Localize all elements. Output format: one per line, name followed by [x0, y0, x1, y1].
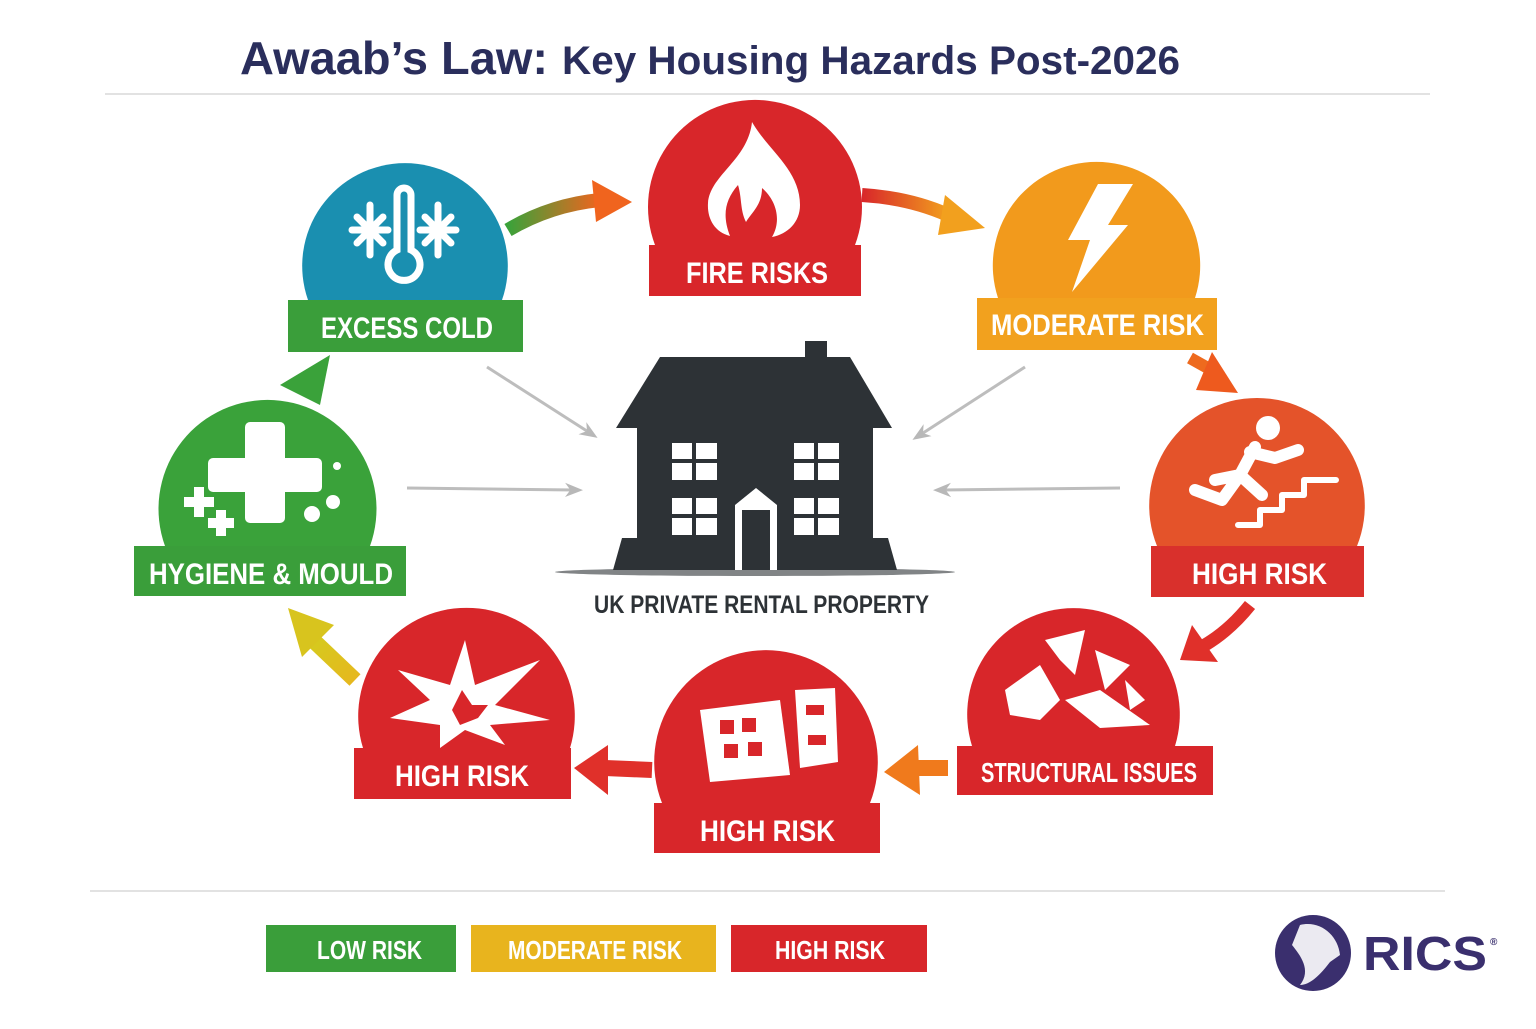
icon: broken brick wall: [700, 688, 838, 782]
node: moderate risk: MODERATE RISK: [991, 309, 1204, 342]
node: structural issues: STRUCTURAL ISSUES: [981, 757, 1197, 788]
arrow: hygiene to cold: [280, 355, 330, 405]
title: Key Housing Hazards Post-2026: [562, 39, 1180, 83]
arrows: gray to house: [407, 367, 1120, 490]
house label: UK PRIVATE RENTAL PROPERTY: [594, 591, 929, 619]
node: high risk stairs: HIGH RISK: [1192, 558, 1327, 591]
icon: medical cross and germs: [184, 422, 341, 536]
node: hygiene and mould: HYGIENE & MOULD: [149, 558, 393, 591]
legend: HIGH RISK: [775, 935, 885, 965]
node: excess cold: [288, 163, 523, 352]
node: fire risks: [648, 100, 862, 296]
arrow: structural to bricks: [884, 745, 948, 795]
title: Awaab’s Law:: [240, 32, 548, 84]
icon: runner on stairs: [1195, 416, 1336, 525]
node: high risk bricks: [654, 650, 880, 853]
icon: explosion: [390, 640, 550, 748]
arrow: bricks to explosion: [574, 745, 652, 795]
node: high risk stairs: [1149, 398, 1365, 597]
house: [555, 341, 955, 576]
arrow: stairs to structural: [1180, 605, 1250, 662]
icon: flame: [708, 122, 800, 237]
node: high risk explosion: HIGH RISK: [395, 760, 529, 793]
node: moderate risk: [977, 162, 1217, 350]
legend: [266, 925, 927, 972]
title: [240, 32, 1180, 84]
logo: RICS: RICS: [1363, 928, 1487, 981]
arrow: cold to fire: [508, 180, 632, 230]
node: high risk bricks: HIGH RISK: [700, 815, 835, 848]
arrow: fire to moderate: [862, 195, 985, 235]
node: fire risks: FIRE RISKS: [686, 257, 828, 290]
icon: thermometer snowflake: [352, 188, 456, 280]
node: structural issues: [957, 608, 1213, 795]
legend: LOW RISK: [317, 935, 422, 965]
arrow: moderate to stairs: [1190, 352, 1238, 393]
icon: lightning: [1068, 184, 1133, 292]
icon: broken pieces: [1005, 630, 1150, 728]
arrow: explosion to hygiene: [288, 608, 355, 680]
node: excess cold: EXCESS COLD: [321, 312, 493, 345]
legend: MODERATE RISK: [508, 935, 682, 965]
node: hygiene and mould: [134, 400, 406, 596]
node: high risk explosion: [354, 608, 575, 799]
logo: RICS: [1275, 915, 1498, 991]
logo: RICS: ®: [1490, 937, 1498, 948]
